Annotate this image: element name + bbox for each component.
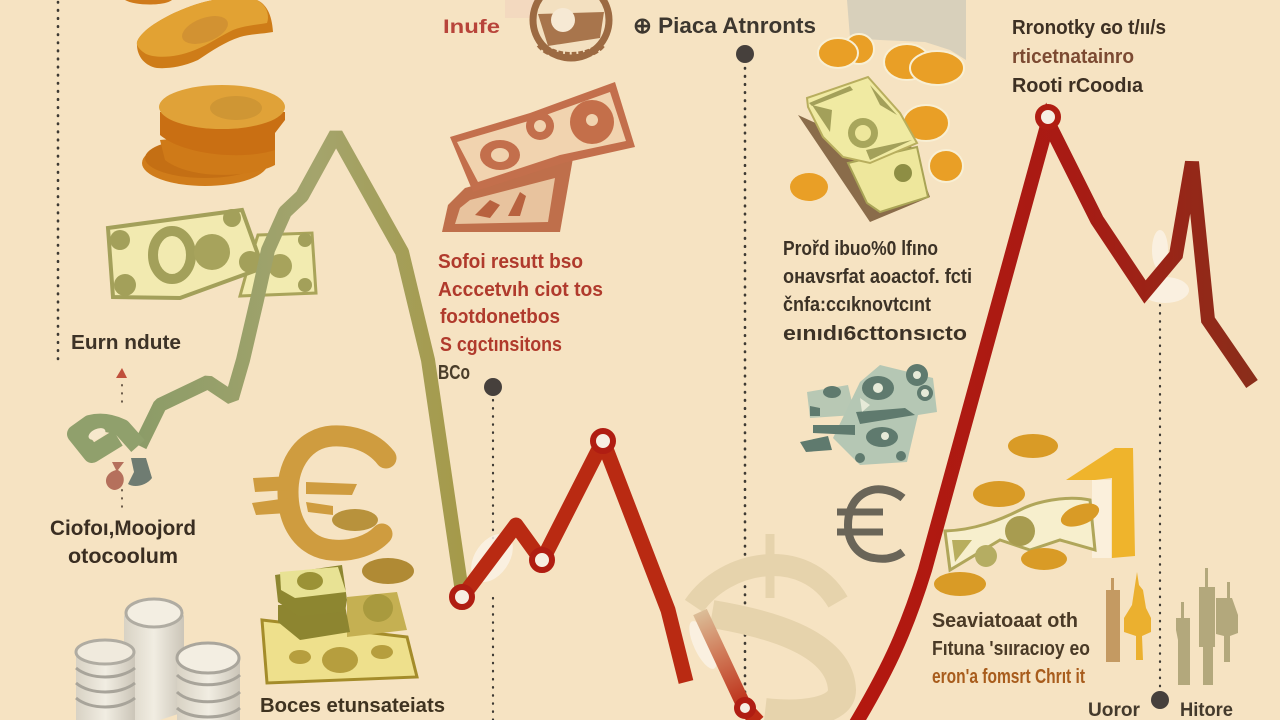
- icon: candlestick bars: [1106, 568, 1238, 685]
- icon: gold coin slab: [137, 0, 273, 68]
- line chart: red segment: [462, 441, 686, 682]
- label: top center: ⊕ Piaca Atnronts: [633, 13, 816, 38]
- icon: brown banknotes: [442, 82, 635, 232]
- icon: money stack: [262, 565, 417, 683]
- icon: teal banknote pile: [800, 364, 937, 465]
- icon: euro grey: [837, 489, 903, 559]
- icon: scattered coins and banknote: [934, 434, 1102, 596]
- icon: gold coin top sliver: [125, 0, 172, 4]
- label: small note: BCo: [438, 362, 470, 384]
- text block: lower right: Seaviatoaat oth: [932, 610, 1078, 632]
- icon: medallion: [505, 0, 609, 58]
- label: left lower: [50, 517, 196, 568]
- text block: center right: čnfa:ccıknovtcınt: [783, 294, 931, 316]
- icon: yellow one numeral: [1066, 448, 1135, 558]
- icon: silver coin stacks: [76, 599, 240, 720]
- chart point markers: [452, 107, 1058, 716]
- text block: red notes: S cgctınsitons: [440, 334, 562, 356]
- label: left lower: otocoolum: [68, 545, 178, 568]
- white blots near lines: [463, 230, 1189, 672]
- label: top center red: Inufe: [443, 17, 500, 38]
- icon: small money bag: [106, 368, 152, 490]
- text block: lower right: [932, 610, 1090, 688]
- text block: lower right: Fıtuna 'sııracıoy eo: [932, 638, 1090, 660]
- text block: red notes: foɔtdonetbos: [440, 306, 560, 328]
- guide markers: [484, 45, 1169, 709]
- grey backdrop top: [847, 0, 966, 60]
- label: left: Eurn ndute: [71, 332, 181, 354]
- label: top right: Rooti rCoodıa: [1012, 75, 1144, 97]
- label: top right: [1012, 17, 1166, 97]
- icon: center gold coins: [790, 34, 964, 201]
- labels: timeline bottom: [1088, 700, 1233, 720]
- icon: wallet with banknotes: [798, 77, 930, 222]
- icon: ghost dollar sign: [694, 534, 842, 713]
- text block: center right: Prořd ibuo%0 lfıno: [783, 238, 938, 260]
- text block: red notes: [438, 251, 603, 356]
- icon: green banknotes: [108, 209, 316, 298]
- label: top right: Rronotky ɢo t/ıı/s: [1012, 17, 1166, 39]
- icon: euro symbol gold: [252, 436, 414, 584]
- text block: center right: eınıdı6cttonsıcto: [783, 323, 967, 345]
- text block: red notes: Acccetvıh ciot tos: [438, 279, 603, 301]
- label: top right: rticetnatainro: [1012, 46, 1134, 68]
- text block: center right: oнavsrfat aoactof. fcti: [783, 266, 972, 288]
- label: bottom center-left: Boces etunsateiats: [260, 695, 445, 717]
- text block: center right: [783, 238, 972, 345]
- line chart: green rise and fall: [76, 134, 462, 592]
- icon: gold coin stack: [142, 85, 285, 186]
- label: left lower: Ciofoı,Moojord: [50, 517, 196, 540]
- text block: lower right: eron'a fomsrt Chrıt it: [932, 666, 1085, 688]
- line chart: faded red segment: [700, 612, 758, 720]
- text block: red notes: Sofoi resutt bso: [438, 251, 583, 273]
- line chart: dark red rise and fall: [852, 122, 1252, 720]
